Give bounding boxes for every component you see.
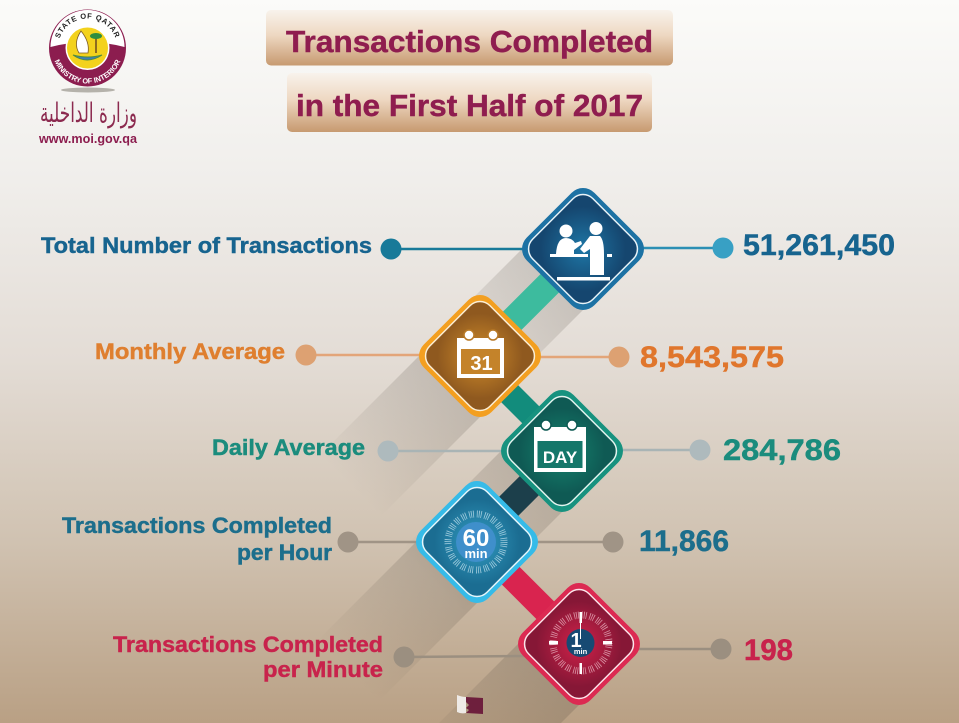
diagonal long shadows: [316, 249, 583, 723]
logo: Ministry of Interior: [49, 10, 126, 92]
label: [62, 513, 332, 565]
label: [113, 632, 383, 682]
left connector dot and line: [394, 646, 525, 668]
logo: Ministry of Interior: MINISTRY OF INTERIOR: [54, 59, 120, 84]
icon: 60 minutes diamond: min: [464, 546, 488, 561]
icon: calendar day diamond: [494, 383, 630, 519]
row 1: total number of transactions: [41, 229, 895, 262]
icon: 1 minute diamond: 1: [570, 630, 582, 652]
label: per Minute: [263, 657, 383, 682]
icon: 1 minute diamond: min: [574, 647, 588, 656]
icon: Qatar flag: [457, 695, 483, 714]
label: Daily Average: [212, 435, 365, 460]
connector: monthly to daily: [480, 364, 555, 439]
row 2: monthly average: [95, 339, 784, 374]
left connector dot and line: [338, 532, 425, 552]
right connector dot and line: [635, 638, 732, 660]
icon: reception desk diamond: [515, 181, 651, 317]
value: 51,261,450: [743, 229, 895, 262]
connector: hourly to per minute: [487, 552, 569, 634]
title line 1: [266, 10, 673, 66]
connector: total to monthly: [495, 258, 575, 338]
label: Total Number of Transactions: [41, 233, 372, 258]
icon: calendar day diamond: DAY: [543, 448, 578, 467]
right connector dot and line: [530, 532, 624, 552]
right connector dot and line: [535, 346, 630, 368]
title line 2: in the First Half of 2017: [296, 88, 643, 123]
left connector dot and line: [378, 440, 510, 462]
label: Monthly Average: [95, 339, 285, 364]
row 4: transactions per hour: [62, 513, 729, 565]
value: 284,786: [723, 434, 841, 467]
value: 11,866: [639, 525, 729, 558]
icon: 60 minutes diamond: [409, 474, 545, 610]
label: Transactions Completed: [113, 632, 383, 657]
title line 1: Transactions Completed: [286, 24, 653, 59]
right connector dot and line: [615, 440, 710, 460]
row 5: transactions per minute: [113, 632, 793, 682]
value: 8,543,575: [640, 341, 784, 374]
icon: 1 minute diamond: [511, 576, 647, 712]
icon: calendar 31 diamond: 31: [470, 353, 493, 375]
icon: calendar 31 diamond: [412, 288, 548, 424]
logo: website: www.moi.gov.qa: [38, 132, 138, 146]
label: per Hour: [237, 540, 332, 565]
logo: Ministry of Interior: STATE OF QATAR: [55, 13, 120, 38]
icon: 60 minutes diamond: 60: [463, 525, 489, 552]
left connector dot and line: [296, 344, 425, 366]
left connector dot and line: [380, 238, 530, 260]
row 3: daily average: [212, 434, 841, 467]
right connector dot and line: [640, 238, 734, 258]
value: 198: [744, 634, 793, 667]
connector: daily to hourly: [490, 470, 545, 525]
label: Transactions Completed: [62, 513, 332, 538]
title line 2: [287, 73, 652, 132]
logo: Arabic name: وزارة الداخلية: [40, 98, 137, 129]
